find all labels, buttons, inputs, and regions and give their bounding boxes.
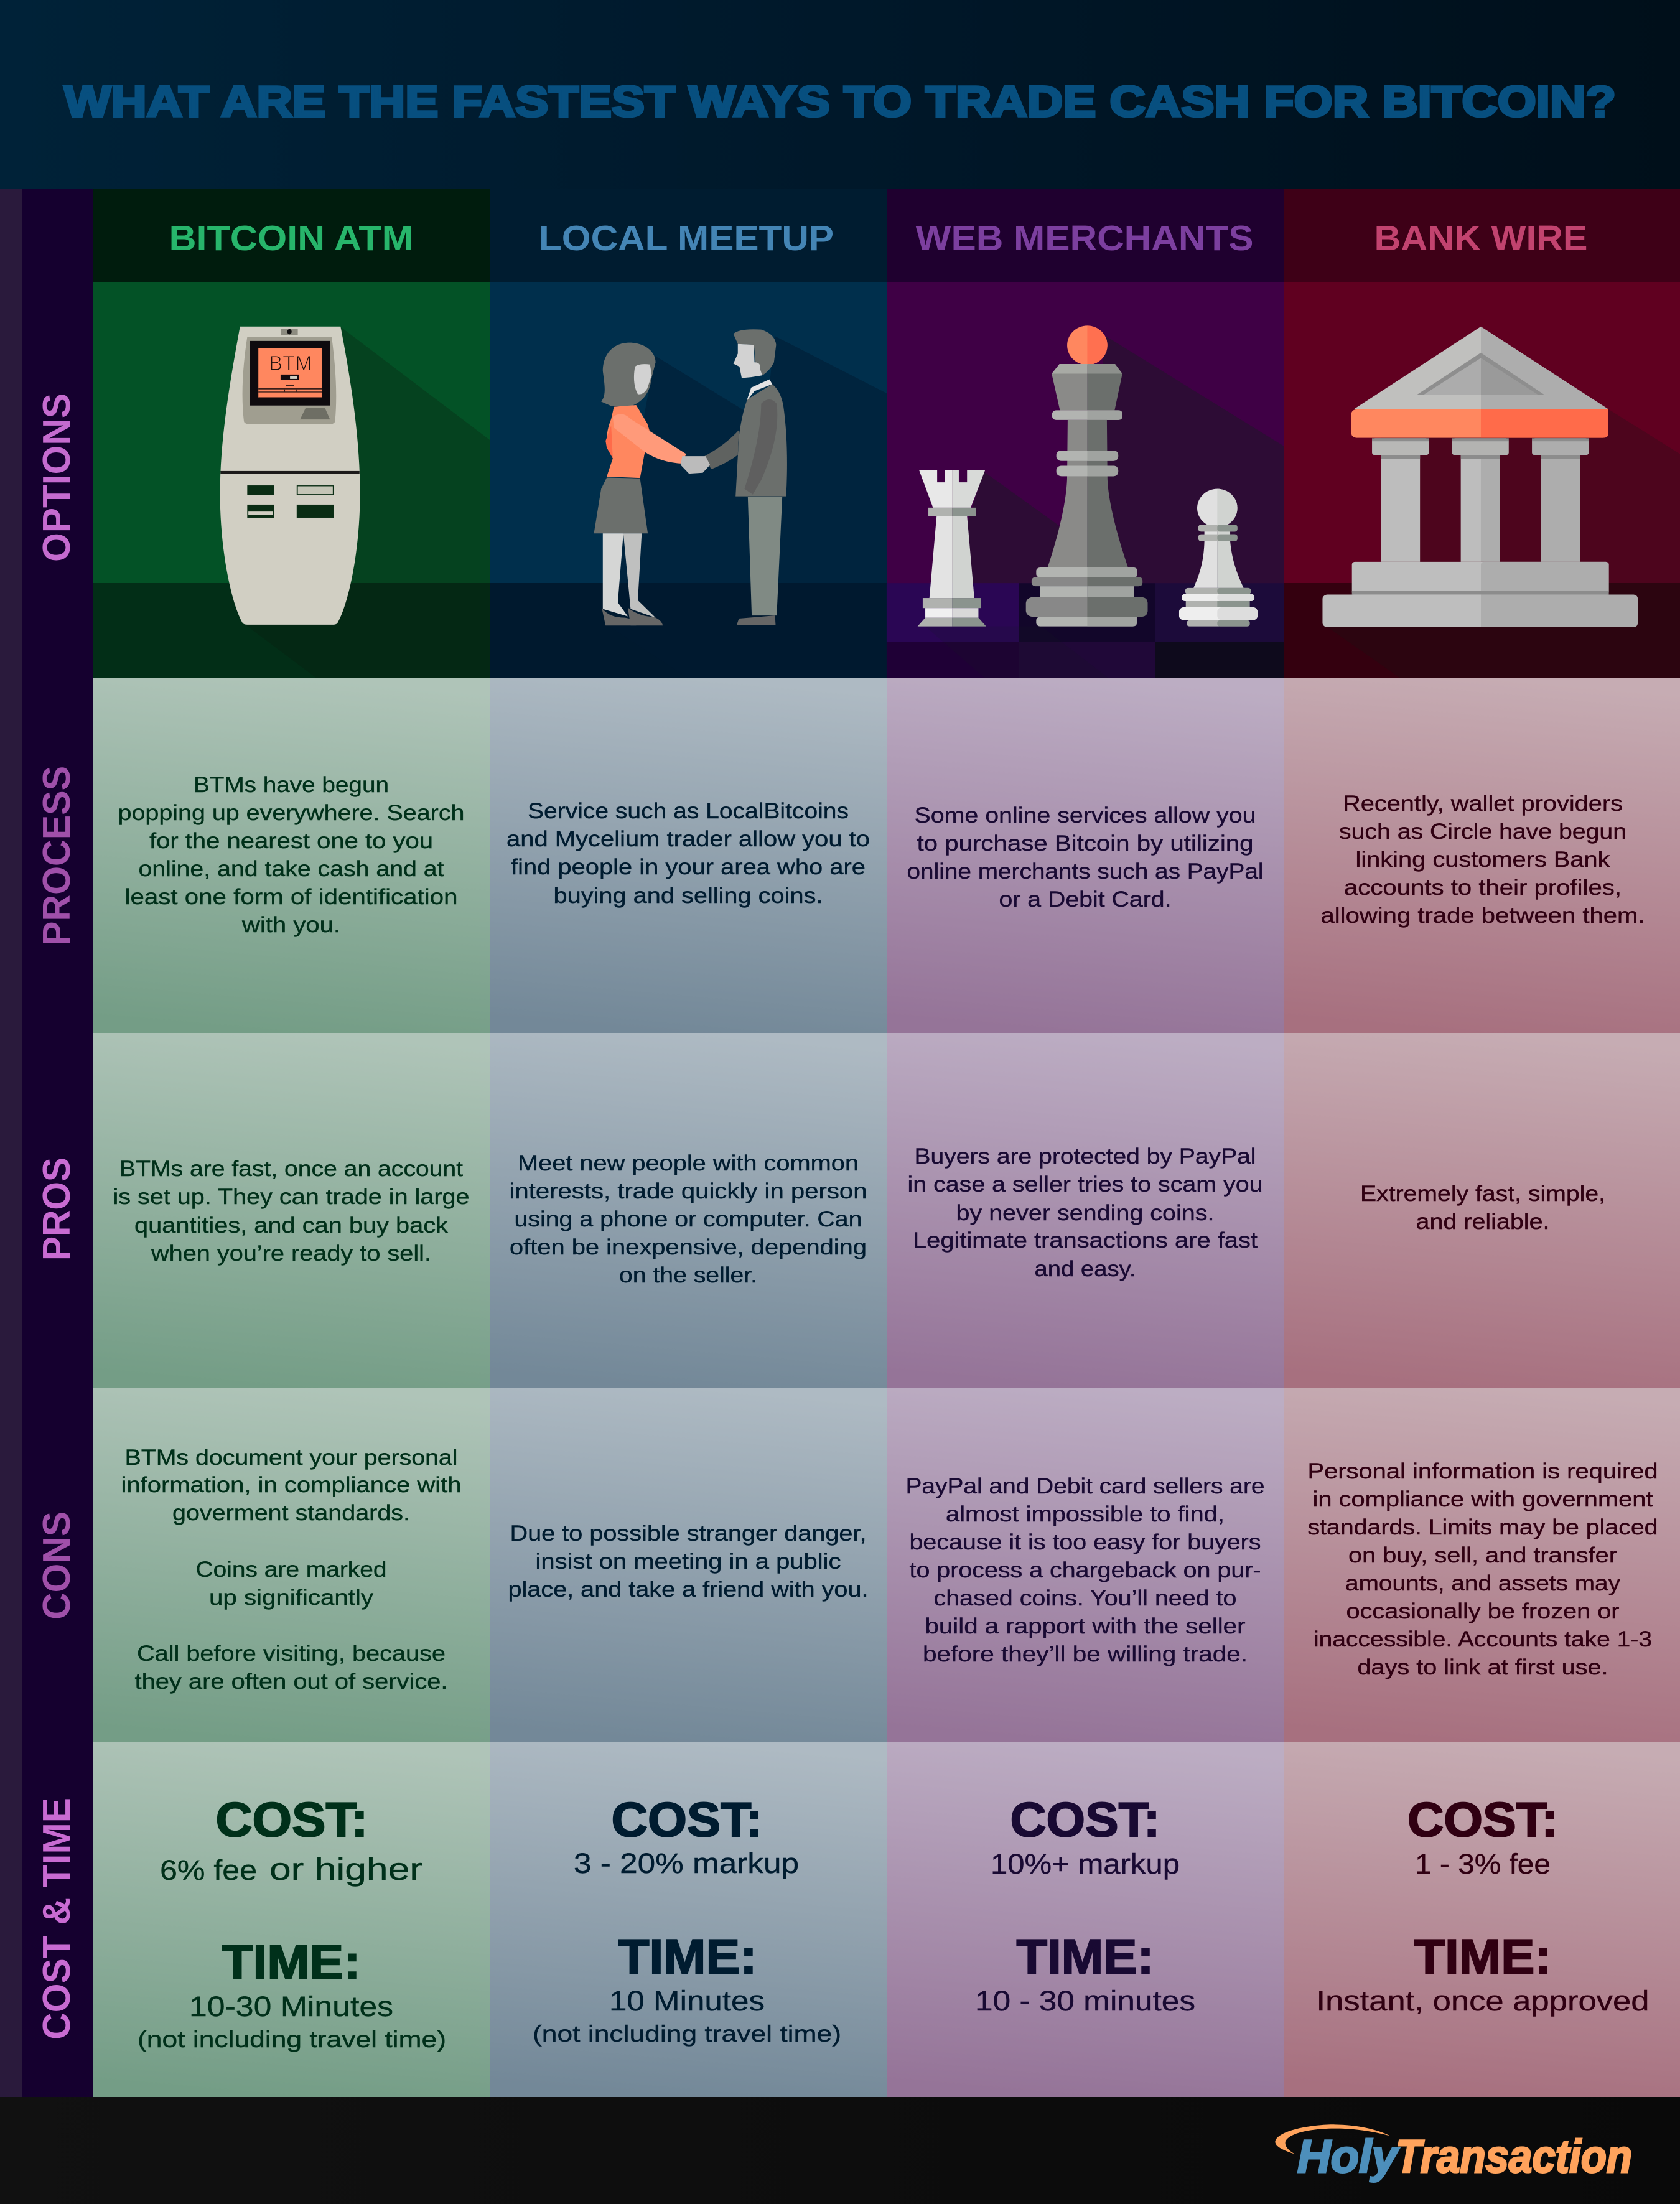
- cost and time cell: local meetup: (not including travel time): [533, 2021, 841, 2047]
- process cell: web merchants: online merchants such as PayPal: [907, 859, 1263, 884]
- cons cell: bitcoin atm: [93, 1388, 490, 1742]
- cons cell: bank wire: inaccessible. Accounts take 1-3: [1314, 1627, 1652, 1651]
- cons cell: web merchants: build a rapport with the seller: [925, 1614, 1246, 1638]
- cons cell: web merchants: almost impossible to find,: [946, 1502, 1225, 1526]
- illustration: bank building: [1284, 282, 1680, 678]
- illustration: bitcoin atm: [93, 282, 490, 678]
- cost and time cell: web merchants: [887, 1742, 1284, 2097]
- process cell: bitcoin atm: BTMs have begun: [194, 773, 389, 797]
- title: WHAT ARE THE FASTEST WAYS TO TRADE CASH FOR BITCOIN?: [64, 77, 1616, 126]
- cons cell: bitcoin atm: BTMs document your personal: [124, 1445, 458, 1470]
- cost and time cell: bank wire: 1 - 3% fee: [1415, 1848, 1551, 1880]
- pros cell: bitcoin atm: quantities, and can buy back: [134, 1213, 449, 1238]
- row label: cons: CONS: [35, 1511, 78, 1620]
- column heading: web merchants: WEB MERCHANTS: [916, 218, 1253, 258]
- column heading: local meetup: LOCAL MEETUP: [539, 218, 834, 258]
- process cell: bank wire: allowing trade between them.: [1320, 904, 1645, 928]
- process cell: bank wire: such as Circle have begun: [1339, 819, 1626, 844]
- pros cell: bank wire: [1284, 1033, 1680, 1388]
- illustration: bitcoin atm: BTM: [269, 352, 312, 375]
- pros cell: web merchants: [887, 1033, 1284, 1388]
- cost and time cell: web merchants: COST:: [1010, 1792, 1160, 1847]
- process cell: web merchants: Some online services allow you: [915, 803, 1256, 828]
- column heading: bitcoin atm: BITCOIN ATM: [169, 218, 413, 258]
- cost and time cell: bitcoin atm: 6% fee: [160, 1854, 257, 1886]
- process cell: bitcoin atm: popping up everywhere. Search: [118, 801, 464, 825]
- pros cell: web merchants: and easy.: [1034, 1257, 1136, 1281]
- process cell: local meetup: buying and selling coins.: [554, 884, 823, 908]
- logo: holytransaction: [1275, 2124, 1632, 2182]
- cons cell: bank wire: occasionally be frozen or: [1346, 1599, 1620, 1623]
- row label: pros: PROS: [35, 1157, 78, 1261]
- cons cell: bank wire: [1284, 1388, 1680, 1742]
- cost and time cell: web merchants: 10 - 30 minutes: [975, 1985, 1195, 2017]
- row label: cost and time: COST & TIME: [35, 1798, 78, 2040]
- cost and time cell: bitcoin atm: [93, 1742, 490, 2097]
- row label: options: OPTIONS: [35, 393, 78, 562]
- process cell: bitcoin atm: with you.: [241, 913, 340, 937]
- pros cell: local meetup: interests, trade quickly in person: [509, 1179, 867, 1203]
- cons cell: bitcoin atm: information, in compliance with: [121, 1473, 462, 1497]
- cost and time cell: local meetup: 3 - 20% markup: [574, 1847, 799, 1879]
- pros cell: web merchants: Legitimate transactions are fast: [913, 1228, 1258, 1253]
- process cell: bitcoin atm: [93, 678, 490, 1033]
- cons cell: local meetup: Due to possible stranger danger,: [510, 1521, 866, 1546]
- logo: holytransaction: Holy: [1297, 2131, 1400, 2182]
- cons cell: web merchants: before they’ll be willing trade.: [923, 1642, 1248, 1666]
- pros cell: bitcoin atm: when you’re ready to sell.: [151, 1241, 431, 1266]
- pros cell: local meetup: often be inexpensive, depending: [510, 1235, 867, 1259]
- cons cell: local meetup: insist on meeting in a public: [535, 1549, 841, 1574]
- pawn: [1179, 489, 1258, 627]
- cons cell: web merchants: PayPal and Debit card sellers are: [906, 1474, 1264, 1498]
- cons cell: web merchants: because it is too easy for buyers: [910, 1530, 1261, 1554]
- cost and time cell: bitcoin atm: COST:: [215, 1792, 368, 1847]
- cons cell: local meetup: place, and take a friend with you.: [508, 1577, 869, 1602]
- cons cell: bank wire: days to link at first use.: [1358, 1655, 1608, 1679]
- pros cell: local meetup: using a phone or computer. Can: [514, 1207, 862, 1231]
- cons cell: bank wire: in compliance with government: [1313, 1487, 1653, 1511]
- cost and time cell: bank wire: Instant, once approved: [1317, 1985, 1649, 2017]
- column heading: bank wire: BANK WIRE: [1374, 218, 1588, 258]
- cost and time cell: bitcoin atm: TIME:: [222, 1935, 361, 1989]
- pros cell: web merchants: Buyers are protected by PayPal: [915, 1144, 1256, 1169]
- cons cell: bitcoin atm: goverment standards.: [172, 1501, 410, 1525]
- process cell: local meetup: and Mycelium trader allow you to: [506, 827, 870, 851]
- sidebar: row labels: [0, 189, 93, 2097]
- process cell: bitcoin atm: least one form of identification: [124, 885, 458, 909]
- cost and time cell: local meetup: TIME:: [618, 1929, 757, 1984]
- process cell: bitcoin atm: online, and take cash and at: [138, 857, 444, 881]
- illustration: handshake people: [490, 282, 887, 678]
- pros cell: bank wire: Extremely fast, simple,: [1360, 1182, 1605, 1206]
- pros cell: web merchants: in case a seller tries to scam you: [907, 1172, 1263, 1197]
- pros cell: web merchants: by never sending coins.: [956, 1201, 1215, 1225]
- cons cell: bitcoin atm: up significantly: [209, 1585, 374, 1610]
- cost and time cell: bitcoin atm: 10-30 Minutes: [189, 1991, 393, 2022]
- column: web merchants: [887, 189, 1284, 2097]
- cost and time cell: local meetup: COST:: [611, 1792, 763, 1847]
- pros cell: local meetup: Meet new people with common: [518, 1151, 859, 1175]
- process cell: local meetup: find people in your area who are: [511, 855, 866, 879]
- queen: [1026, 325, 1147, 627]
- process cell: web merchants: to purchase Bitcoin by utilizing: [917, 831, 1253, 856]
- cost and time cell: web merchants: TIME:: [1017, 1929, 1154, 1984]
- cons cell: bitcoin atm: Call before visiting, because: [137, 1641, 446, 1666]
- cons cell: web merchants: chased coins. You’ll need to: [933, 1586, 1237, 1610]
- process cell: bank wire: [1284, 678, 1680, 1033]
- pros cell: bitcoin atm: BTMs are fast, once an account: [119, 1157, 463, 1181]
- process cell: bank wire: linking customers Bank: [1355, 848, 1610, 872]
- process cell: web merchants: or a Debit Card.: [999, 887, 1171, 912]
- illustration: chess pieces: [887, 282, 1284, 678]
- cons cell: bitcoin atm: Coins are marked: [195, 1557, 387, 1582]
- process cell: bitcoin atm: for the nearest one to you: [149, 829, 433, 853]
- pros cell: local meetup: [490, 1033, 887, 1388]
- pros cell: bitcoin atm: is set up. They can trade in large: [113, 1185, 469, 1209]
- column: bank wire: [1284, 189, 1680, 2097]
- pros cell: local meetup: on the seller.: [619, 1263, 757, 1287]
- process cell: local meetup: [490, 678, 887, 1033]
- cons cell: bank wire: on buy, sell, and transfer: [1348, 1543, 1617, 1567]
- process cell: local meetup: Service such as LocalBitcoins: [528, 799, 849, 823]
- cons cell: web merchants: [887, 1388, 1284, 1742]
- cost and time cell: bank wire: COST:: [1407, 1792, 1558, 1847]
- header band: [0, 0, 1680, 189]
- cost and time cell: web merchants: 10%+ markup: [991, 1848, 1180, 1880]
- footer band: [0, 2097, 1680, 2204]
- rook: [918, 470, 986, 627]
- cost and time cell: bitcoin atm: (not including travel time): [138, 2027, 446, 2052]
- process cell: bank wire: Recently, wallet providers: [1343, 791, 1623, 816]
- pros cell: bank wire: and reliable.: [1416, 1210, 1549, 1234]
- cons cell: bank wire: amounts, and assets may: [1345, 1571, 1621, 1595]
- process cell: bank wire: accounts to their profiles,: [1344, 876, 1622, 900]
- cost and time cell: bank wire: [1284, 1742, 1680, 2097]
- cost and time cell: bitcoin atm: or higher: [269, 1852, 422, 1887]
- logo: holytransaction: Transaction: [1396, 2131, 1632, 2182]
- cons cell: web merchants: to process a chargeback on pur-: [910, 1558, 1261, 1582]
- pros cell: bitcoin atm: [93, 1033, 490, 1388]
- cost and time cell: local meetup: [490, 1742, 887, 2097]
- cons cell: bitcoin atm: they are often out of service.: [134, 1669, 448, 1694]
- cons cell: local meetup: [490, 1388, 887, 1742]
- cost and time cell: local meetup: 10 Minutes: [609, 1985, 765, 2017]
- row label: process: PROCESS: [35, 766, 78, 946]
- column: local meetup: [490, 189, 887, 2097]
- process cell: web merchants: [887, 678, 1284, 1033]
- column: bitcoin atm: [93, 189, 490, 2097]
- cons cell: bank wire: Personal information is required: [1308, 1459, 1658, 1483]
- cons cell: bank wire: standards. Limits may be placed: [1308, 1515, 1658, 1539]
- cost and time cell: bank wire: TIME:: [1414, 1929, 1552, 1984]
